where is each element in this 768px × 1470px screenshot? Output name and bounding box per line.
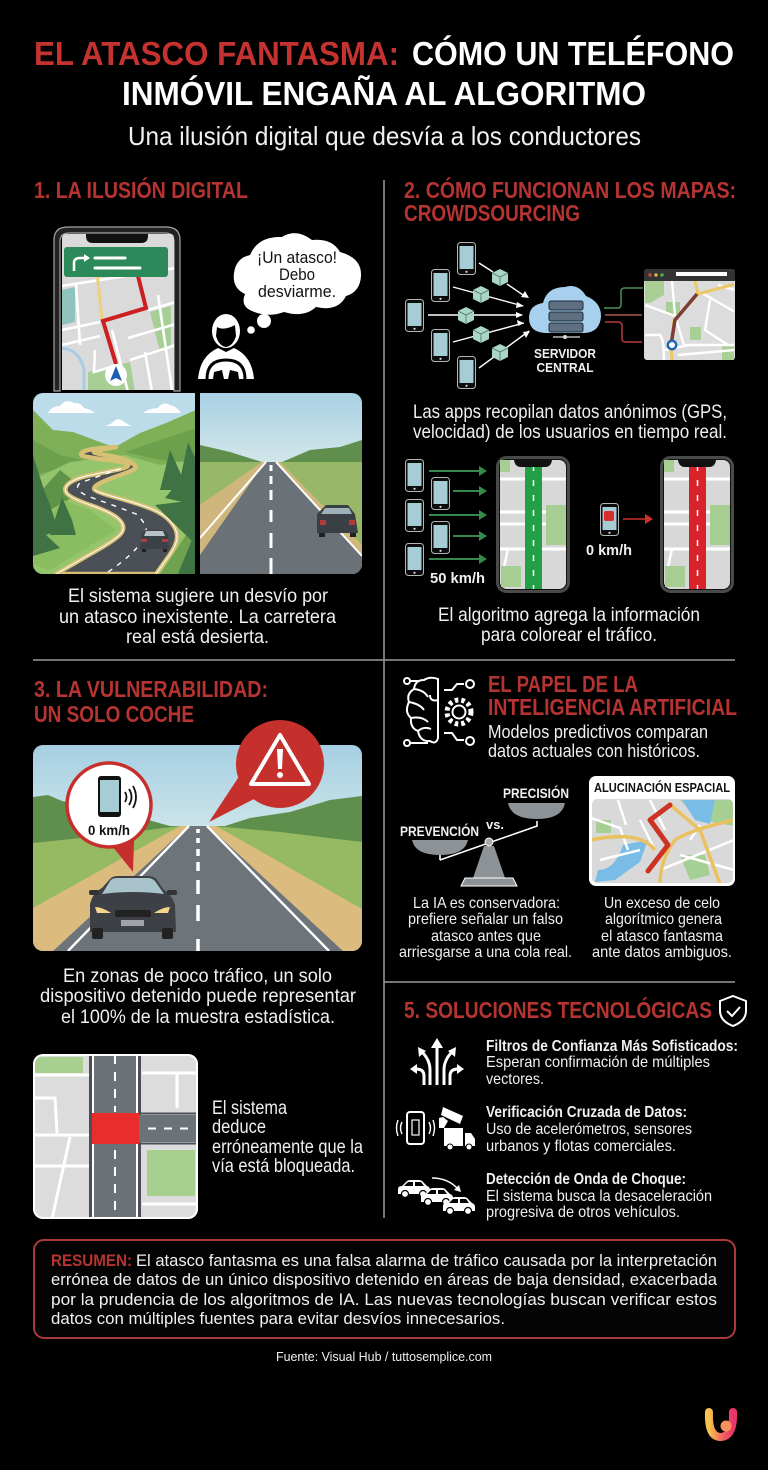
caption: recopilan datos: velocidad) de los usuarios en tiempo real. [413,421,727,443]
text: detección [486,1171,712,1221]
caption: conservadora: prefiere señalar un falso [408,911,563,928]
caption: vía bloqueada: erróneamente que la [212,1136,363,1158]
caption: exceso de celo: ante datos ambiguos. [592,944,732,961]
caption 1: El sistema sugiere un desvío por [68,585,328,607]
heading: IA: EL PAPEL DE LA [488,671,638,697]
heading 2: CROWDSOURCING [404,200,580,226]
summary box [34,1240,735,1338]
text: verificación: Verificación Cruzada de Datos: [486,1104,687,1121]
source: Fuente: Visual Hub / tuttosemplice.com [276,1349,492,1364]
heading 5: 5. SOLUCIONES TECNOLÓGICAS [404,996,712,1023]
icon: cloud server: CENTRAL [536,360,594,375]
intro text: Modelos predictivos comparan [488,722,708,742]
map in browser window [644,269,735,360]
summary box: datos con múltiples fuentes para evitar desvíos innecesarios. [51,1309,505,1328]
caption: conservadora [399,895,572,961]
caption: recopilan datos: Las apps recopilan datos anónimos (GPS, [413,401,727,423]
icon: stopped car [89,876,177,939]
callout: phone 0 km/h: 0 km/h [88,822,130,838]
caption: vía bloqueada: deduce [212,1116,266,1138]
caption: colorear el tráfico: para colorear el tráfico. [481,624,657,646]
callout: thought bubble: Debo [279,265,315,284]
text: filtros: vectores. [486,1071,544,1088]
heading 3: UN SOLO COCHE [34,701,194,727]
image: road with stopped car [33,745,362,951]
callout: phone 0 km/h [67,763,151,872]
caption: exceso de celo: Un exceso de celo [604,895,720,912]
text: verificación: Uso de acelerómetros, sensores [486,1121,692,1138]
icon: brain and gears [404,678,474,746]
caption 1 [59,585,336,648]
trees [33,442,196,574]
road [56,447,177,574]
caption: colorear el tráfico: El algoritmo agrega la información [438,604,700,626]
icon: phone, camera and truck [396,1107,475,1150]
caption: exceso de celo: algorítmico genera [605,911,722,928]
text: verificación [486,1104,692,1155]
icon: balance scale: PRECISIÓN [503,784,569,801]
text: detección: El sistema busca la desaceleración [486,1188,712,1205]
image: straight empty road [200,393,362,574]
diagram: traffic colouring: 50 km/h [430,570,485,587]
intro text: datos actuales con históricos. [488,741,700,761]
intro text [488,722,708,761]
caption: vía bloqueada [212,1097,363,1177]
icon: balance scale [400,784,569,886]
callout: thought bubble: desviarme. [258,282,336,301]
caption: recopilan datos [413,401,727,443]
icon: phone with navigation map [54,227,180,392]
car on winding road [140,530,169,552]
caption 1: un atasco inexistente. La carretera [59,606,336,628]
text: detección: Detección de Onda de Choque: [486,1171,686,1188]
map card: alucinación espacial: ALUCINACIÓN ESPACIAL [594,780,730,795]
panel: 5. soluciones tecnológicas [396,996,746,1221]
panel: el papel de la inteligencia artificial [399,671,737,961]
title: INMÓVIL ENGAÑA AL ALGORITMO [122,75,646,112]
summary box: errónea de datos de un único dispositivo detenido en áreas de baja densidad, exacerbada [51,1270,718,1289]
caption: exceso de celo [592,895,732,961]
summary box: RESUMEN: [51,1251,132,1270]
icon: driver [198,314,254,379]
panel: 2. cómo funcionan los mapas [404,176,736,646]
caption 3 [40,965,356,1028]
diagram: traffic colouring [406,458,732,592]
map card: alucinación espacial [589,776,735,886]
subtitle: Una ilusión digital que desvía a los conductores [128,121,641,151]
icon: balance scale: PREVENCIÓN [400,822,479,839]
phone: green road [498,458,568,592]
heading 3 [34,676,268,727]
text: detección: progresiva de otros vehículos. [486,1204,680,1221]
title [34,35,734,112]
map: blocked road [33,1054,198,1219]
panel: 3. la vulnerabilidad [33,676,363,1219]
phone: red road [662,458,732,592]
title: CÓMO UN TELÉFONO [412,35,734,72]
caption 3: el 100% de la muestra estadística. [61,1006,335,1028]
icon: shield check [720,996,746,1026]
caption: colorear el tráfico [438,604,700,646]
caption: exceso de celo: el atasco fantasma [601,928,723,945]
caption 3: dispositivo detenido puede representar [40,985,356,1007]
heading 1: 1. LA ILUSIÓN DIGITAL [34,176,248,203]
text: filtros [486,1038,738,1088]
heading 3: 3. LA VULNERABILIDAD: [34,676,268,702]
image: winding mountain road [33,393,196,574]
caption 1: real está desierta. [126,626,269,648]
icon: cloud server [529,286,601,375]
summary box: El atasco fantasma es una falsa alarma de tráfico causada por la interpretación [136,1251,717,1270]
icon: diverging arrows [410,1038,464,1085]
callout: thought bubble [234,233,361,334]
title: EL ATASCO FANTASMA: [34,35,399,72]
callout: warning [209,720,324,822]
caption 3: En zonas de poco tráfico, un solo [63,965,332,987]
text: verificación: urbanos y flotas comerciales. [486,1138,676,1155]
diagram: traffic colouring: 0 km/h [586,542,632,559]
icon: cars shock wave [398,1178,475,1214]
caption: conservadora: La IA es conservadora: [413,895,560,912]
caption: vía bloqueada: vía está bloqueada. [212,1155,355,1177]
caption: conservadora: atasco antes que [431,928,541,945]
diagram: phones send data to server [406,242,735,388]
caption: conservadora: arriesgarse a una cola real. [399,944,572,961]
callout: thought bubble: ¡Un atasco! [257,248,337,267]
heading 2 [404,176,736,226]
caption: vía bloqueada: El sistema [212,1097,287,1119]
logo [709,1412,733,1437]
heading: IA [488,671,737,720]
summary box: por la prudencia de los algoritmos de IA. Las nuevas tecnologías buscan verificar estos [51,1290,717,1309]
panel: 1. la ilusión digital [33,176,362,648]
icon: balance scale: vs. [486,817,504,832]
car on straight road [317,505,358,537]
text: filtros: Esperan confirmación de múltiples [486,1054,710,1071]
icon: cloud server: SERVIDOR [534,346,597,361]
